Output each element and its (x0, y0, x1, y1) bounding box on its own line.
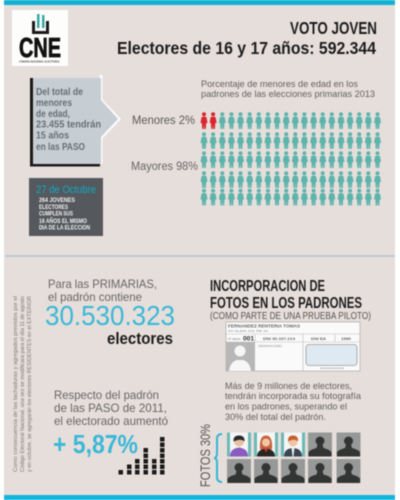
text: para las primarias: el padrón contiene (48, 290, 142, 304)
chart heading: Porcentaje de menores de edad en los (201, 79, 358, 90)
text: respecto del padrón: Respecto del padrón (54, 388, 159, 402)
id card sample (226, 322, 360, 371)
top cyan bar (4, 0, 395, 5)
callout: 27 de Octubre: 264 JOVENES (39, 198, 75, 204)
callout: 27 de Octubre: DIA DE LA ELECCION (39, 226, 90, 232)
id card sample: 1980 (341, 336, 352, 341)
callout: menores de edad: menores (36, 98, 72, 109)
bottom cyan bar (4, 495, 395, 500)
title: Electores de 16 y 17 años: 592.344 (117, 38, 376, 58)
id card sample: 001 (243, 336, 255, 342)
label: Menores 2%: Menores 2% (132, 115, 195, 127)
callout: 27 de Octubre: CUMPLEN SUS (39, 212, 73, 218)
text: más de 9 millones: 30% del total del padrón. (225, 412, 326, 423)
text: más de 9 millones: en los padrones, superando el (225, 402, 347, 412)
text: respecto del padrón: el electorado aumentó (54, 414, 168, 428)
id card sample: FERNANDEZ RENTERIA TOMAS (228, 324, 300, 328)
callout: 27 de Octubre: ELECTORES (39, 205, 68, 211)
callout: 27 de Octubre: 27 de Octubre (36, 184, 96, 196)
label: fotos 30%: FOTOS 30% (197, 424, 213, 487)
id card sample: AV ALEM 232 PB 10 (228, 329, 268, 333)
id card sample: OBSERVACIONES (258, 344, 282, 348)
text: más de 9 millones: tendrán incorporada su fotografía (225, 391, 362, 402)
photo grid (227, 432, 360, 483)
heading: incorporacion de fotos: (COMO PARTE DE UNA PRUEBA PILOTO) (210, 311, 371, 322)
vertical footnote (13, 296, 33, 472)
text: para las primarias (48, 277, 157, 304)
id card sample: DNI EA (311, 336, 326, 341)
id card sample: Nº MESA (228, 337, 241, 341)
chart heading: padrones de las elecciones primarias 2013 (201, 89, 375, 100)
id card sample: DNI 30.107.214 (263, 336, 296, 341)
text: respecto del padrón: de las PASO de 2011, (54, 401, 167, 415)
logo: CNE: CÁMARA NACIONAL ELECTORAL (19, 58, 60, 64)
icon: rising bars (118, 437, 164, 474)
callout: 27 de Octubre (29, 178, 103, 236)
portrait: young person, purple shirt (227, 432, 251, 456)
text: respecto del padrón (54, 388, 168, 428)
silhouette placeholders (227, 432, 360, 483)
label: Mayores 98%: Mayores 98% (131, 161, 198, 173)
heading: incorporacion de fotos: INCORPORACION DE (210, 278, 325, 295)
pictogram chart (199, 111, 381, 206)
text: para las primarias: Para las PRIMARIAS, (48, 277, 157, 291)
portrait: man, orange hair, suit (281, 432, 305, 456)
text: más de 9 millones: Más de 9 millones de electores, (225, 381, 352, 392)
vertical footnote: Como consecuencia de las tachaduras y agregados previstos por el (13, 296, 19, 472)
vertical footnote: y en octubre, se agregarán los electores RESIDENTES en el EXTERIOR (27, 296, 33, 472)
title (117, 18, 377, 58)
callout: 27 de Octubre: 16 AÑOS EL MISMO (39, 218, 87, 225)
callout: menores de edad: 23.455 tendrán (36, 120, 101, 130)
portrait: woman, red hair (254, 432, 278, 456)
chart heading (201, 79, 375, 100)
callout: menores de edad: 15 años (36, 130, 69, 142)
logo: CNE (12, 10, 68, 66)
vertical footnote: Código Electoral Nacional, una vez se modificara para el día 11 de agosto (20, 296, 26, 472)
figure: +5,87%: + 5,87% (53, 429, 138, 459)
callout: menores de edad: en las PASO (36, 142, 85, 153)
logo: CNE: CNE (19, 32, 61, 63)
label: electores: electores (107, 329, 173, 348)
callout: menores de edad (30, 75, 119, 166)
callout: menores de edad: de edad, (36, 109, 70, 120)
brace (214, 434, 222, 482)
text: más de 9 millones (225, 381, 362, 423)
heading: incorporacion de fotos (210, 278, 371, 322)
figure: 30.530.323: 30.530.323 (45, 300, 175, 331)
callout: menores de edad: Del total de (36, 87, 83, 98)
